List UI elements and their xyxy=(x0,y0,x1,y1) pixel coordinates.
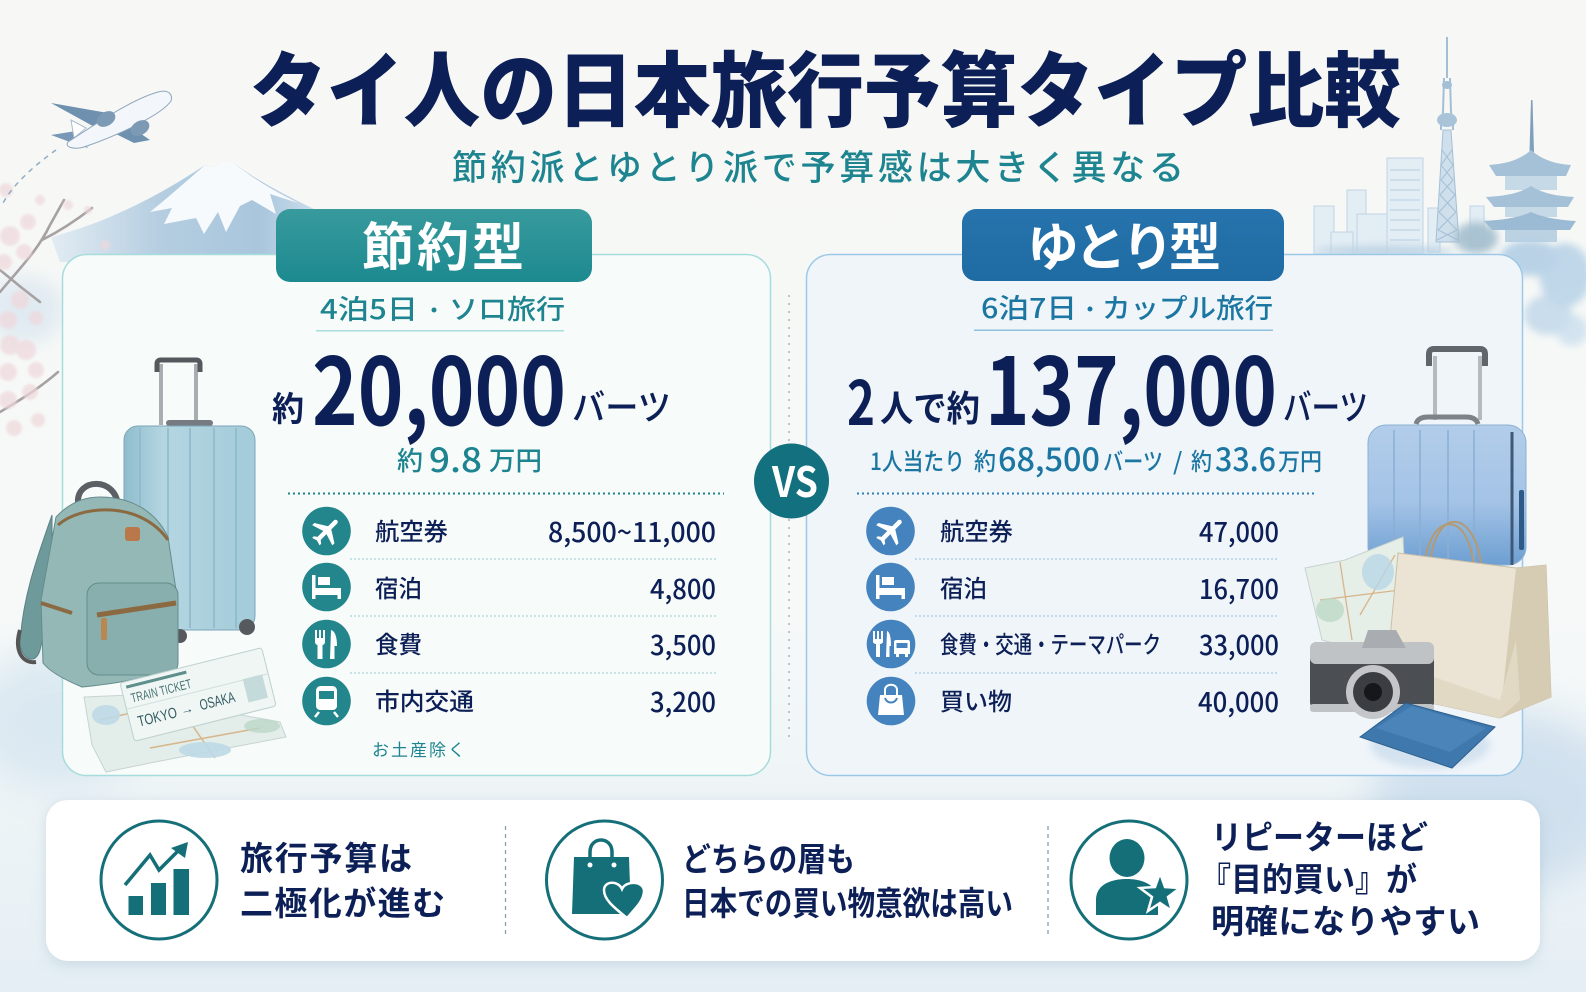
icon: shopping bag with heart xyxy=(546,821,662,939)
row: city transport: 3,200 xyxy=(650,681,716,720)
takeaway: budgets polarizing: 二極化が進む xyxy=(240,877,445,925)
budget type: trip length: 4泊5日 xyxy=(320,288,418,327)
comfort type: trip length: 6泊7日 xyxy=(981,287,1077,326)
row: lodging: 4,800 xyxy=(650,568,716,607)
comfort type: per person amount: 1人当たり xyxy=(870,442,965,477)
takeaway: shopping desire: どちらの層も xyxy=(682,833,855,881)
row: airfare: 航空券 xyxy=(375,512,448,547)
budget type: total amount: バーツ xyxy=(572,379,671,431)
illustration: pale suitcase xyxy=(124,360,255,643)
comfort type: total amount: 人で約 xyxy=(880,380,980,432)
icon: person with star xyxy=(1071,821,1187,939)
illustration: airplane with dashed trail xyxy=(2,91,171,205)
row: airfare xyxy=(302,507,716,555)
row: shopping: 40,000 xyxy=(1198,681,1279,720)
comfort type: trip length xyxy=(974,287,1273,331)
takeaway: repeat visitors xyxy=(1071,811,1480,943)
comfort type: total amount: 137,000 xyxy=(985,317,1277,452)
illustration: train ticket: → xyxy=(179,700,195,718)
comfort type: cost breakdown list xyxy=(866,507,1279,725)
center dotted divider xyxy=(788,295,790,740)
panel: comfort type card xyxy=(806,254,1522,776)
panel: budget type card xyxy=(62,254,770,776)
title: タイ人の日本旅行予算タイプ比較 xyxy=(250,25,1401,144)
row: city transport xyxy=(302,677,716,725)
comfort type: per person amount xyxy=(870,435,1322,481)
row: food: 食費 xyxy=(375,625,422,660)
illustration: train ticket: TOKYO xyxy=(136,704,179,731)
badge: comfort type xyxy=(962,206,1284,281)
budget type: cost breakdown list xyxy=(302,507,716,761)
row: airfare: 航空券 xyxy=(940,512,1013,547)
illustration: backpack xyxy=(18,484,178,687)
takeaway: budgets polarizing: 旅行予算は xyxy=(240,832,412,880)
row: airfare: 8,500~11,000 xyxy=(548,511,716,550)
footnote: excluding souvenirs: お土産除く xyxy=(372,736,465,761)
row: lodging xyxy=(302,563,716,611)
comfort type: total amount: バーツ xyxy=(1283,379,1368,431)
badge: comfort type: ゆとり型 xyxy=(1027,206,1221,281)
comfort type: total amount xyxy=(847,317,1368,452)
illustration: train ticket: OSAKA xyxy=(198,689,237,714)
budget type: yen equivalent: 万円 xyxy=(489,441,542,478)
row: lodging: 16,700 xyxy=(1199,568,1279,607)
comfort type: per person amount: 約 xyxy=(974,442,996,477)
comfort type: per person amount: 約 xyxy=(1191,442,1212,477)
budget type: yen equivalent: 9.8 xyxy=(429,434,482,482)
illustration: train ticket xyxy=(120,648,276,741)
illustration: map under ticket xyxy=(84,695,286,772)
row: food, transport and theme park: 食費・交通・テーマパーク xyxy=(940,625,1161,660)
comfort type: total amount: 2 xyxy=(847,354,875,443)
row: food, transport and theme park: 33,000 xyxy=(1199,624,1279,663)
panel: key takeaways xyxy=(46,800,1540,961)
row: airfare xyxy=(866,507,1279,555)
illustration: shopping bag xyxy=(1385,522,1551,718)
VS badge xyxy=(754,444,829,518)
budget type: yen equivalent: 約 xyxy=(397,441,423,478)
row: airfare: 47,000 xyxy=(1199,511,1279,550)
illustration: Mount Fuji xyxy=(51,163,330,262)
illustration: pagoda and trees xyxy=(1315,100,1586,346)
budget type: total amount: 約 xyxy=(272,382,304,431)
row: shopping xyxy=(867,677,1279,725)
comfort type: per person amount: / xyxy=(1173,442,1182,477)
row: lodging: 宿泊 xyxy=(375,569,422,604)
illustration: folded map xyxy=(1305,537,1408,645)
takeaway: shopping desire: 日本での買い物意欲は高い xyxy=(682,877,1013,925)
illustration: Tokyo skyline and tower xyxy=(1314,37,1484,254)
illustration: blue suitcase xyxy=(1368,349,1526,565)
illustration: wallet xyxy=(1360,703,1495,769)
takeaway: repeat visitors: 明確になりやすい xyxy=(1211,895,1480,943)
comfort type: trip length: カップル旅行 xyxy=(1102,287,1273,326)
illustration: cherry blossom branch xyxy=(0,183,110,436)
budget type: total amount: 20,000 xyxy=(312,317,566,452)
illustration: train ticket: TRAIN TICKET xyxy=(129,676,193,706)
badge: budget type: 節約型 xyxy=(362,206,524,281)
subtitle: 節約派とゆとり派で予算感は大きく異なる xyxy=(452,140,1184,191)
row: city transport: 市内交通 xyxy=(375,682,474,717)
takeaway: shopping desire xyxy=(546,821,1013,939)
budget type: trip length xyxy=(316,288,565,332)
comfort type: per person amount: 33.6 xyxy=(1215,435,1276,481)
icon: rising bar chart xyxy=(101,821,217,939)
takeaway: repeat visitors: リピーターほど xyxy=(1211,811,1428,859)
row: lodging: 宿泊 xyxy=(940,569,987,604)
VS badge: VS xyxy=(771,449,818,510)
illustration: camera xyxy=(1310,630,1434,719)
row: food, transport and theme park xyxy=(867,620,1279,668)
badge: budget type xyxy=(276,206,592,282)
budget type: yen equivalent xyxy=(397,434,542,482)
comfort type: per person amount: 万円 xyxy=(1278,442,1322,477)
row: food xyxy=(302,620,716,668)
comfort type: per person amount: 68,500 xyxy=(998,435,1100,481)
takeaway: repeat visitors: 『目的買い』が xyxy=(1200,853,1417,901)
row: food: 3,500 xyxy=(650,624,716,663)
comfort type: per person amount: バーツ xyxy=(1103,442,1163,477)
budget type: trip length: ソロ旅行 xyxy=(449,288,565,327)
row: shopping: 買い物 xyxy=(940,682,1012,717)
row: lodging xyxy=(866,563,1279,611)
takeaway: budgets polarizing xyxy=(101,821,445,939)
